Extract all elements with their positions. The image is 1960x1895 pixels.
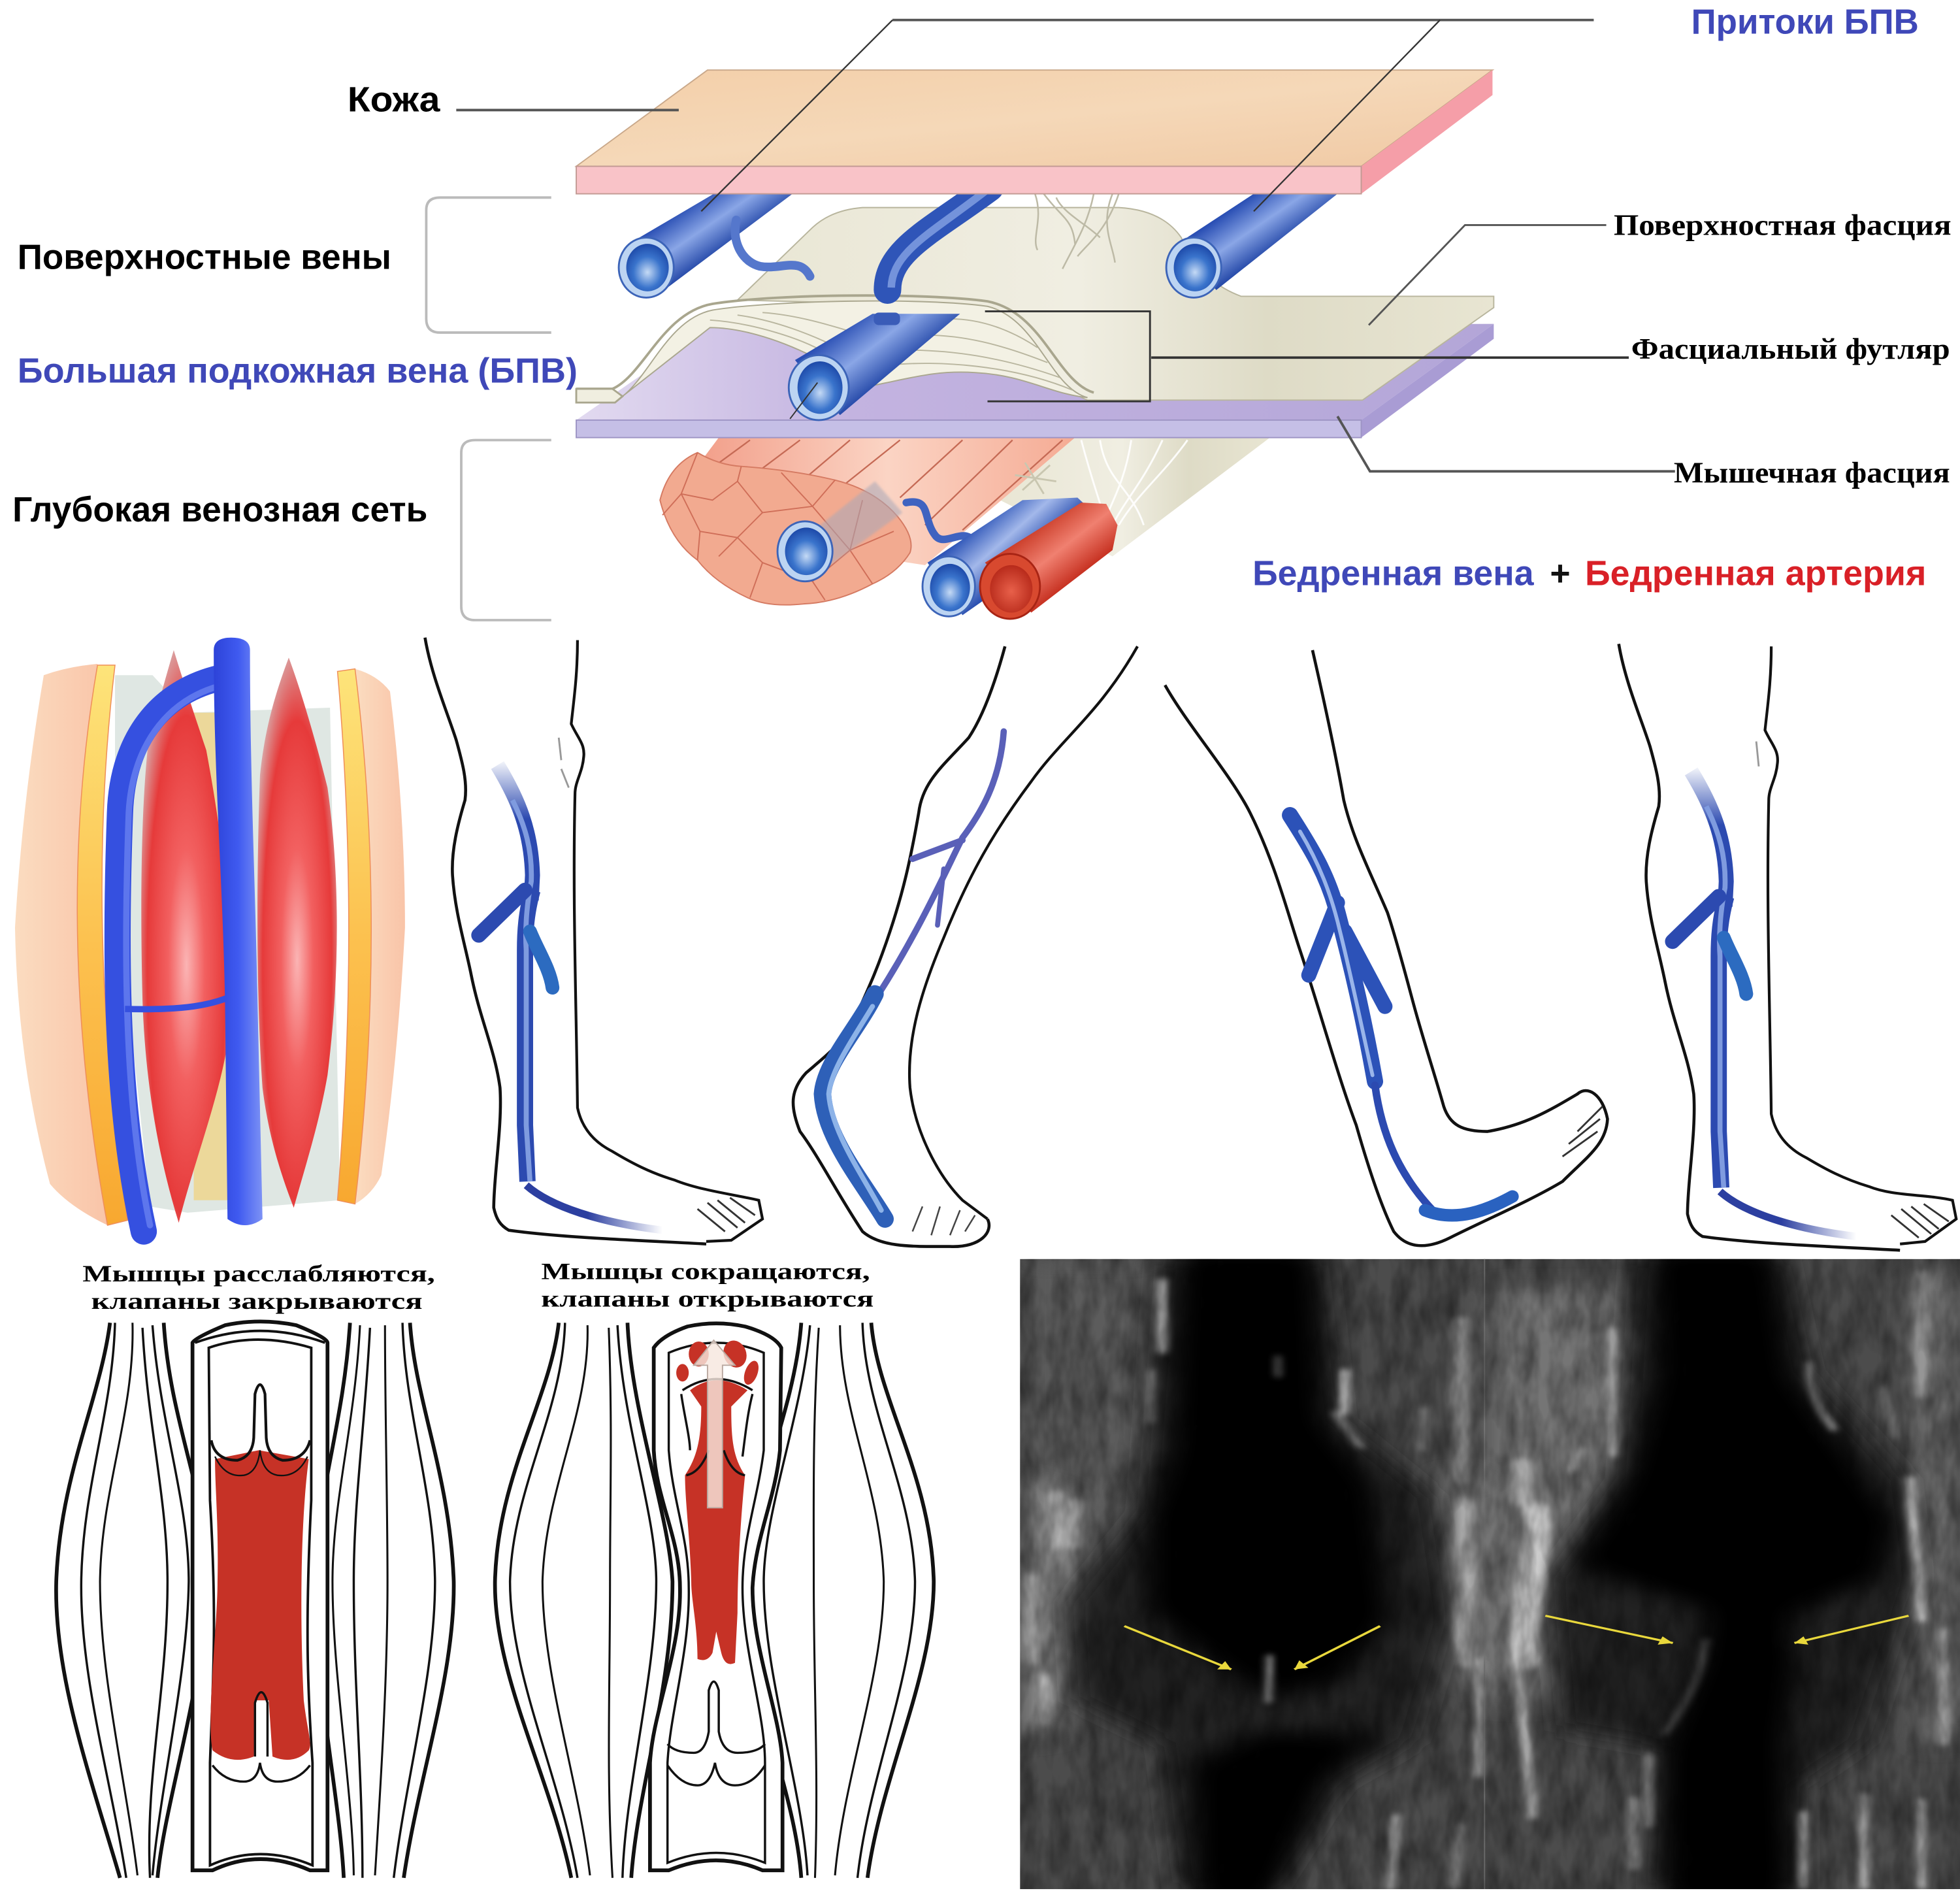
ultrasound speckle [1020, 1259, 1960, 1889]
deep vein shadow [813, 482, 902, 569]
left fat band [77, 665, 127, 1225]
ultrasound dark halos [1068, 1259, 1919, 1889]
closed lower valve [668, 1681, 765, 1785]
vein wall [193, 1321, 327, 1870]
left skin [15, 664, 108, 1225]
leader lines [456, 20, 1675, 471]
muscle fibres left [495, 1323, 672, 1878]
panel: contracted muscles and open valves [495, 1323, 934, 1878]
muscle body strip [700, 438, 1075, 565]
tributary squiggle [735, 220, 810, 276]
leg 4 outline and vein [1619, 644, 1956, 1250]
lower valve [212, 1692, 310, 1781]
superficial vein stub [874, 312, 900, 325]
caption: relaxed: клапаны закрываются [91, 1288, 423, 1314]
great saphenous vein leg 2 [823, 731, 1004, 1219]
caption: contracted: клапаны открываются [541, 1285, 874, 1311]
open upper valve leaflets [681, 1379, 753, 1475]
label: femoral vein + artery: Бедренная артерия [1585, 554, 1926, 593]
ultrasound black regions [1147, 1247, 1895, 1895]
superficial vein right tube [1166, 194, 1337, 297]
deep tributary squiggle [906, 502, 973, 540]
label: Мышечная фасция: Мышечная фасция [1674, 456, 1950, 489]
leg 2 outline and vein [793, 646, 1137, 1247]
leg 3 outline and vein [1165, 650, 1607, 1245]
caption: relaxed: Мышцы расслабляются, [82, 1261, 435, 1287]
blood column [210, 1450, 310, 1760]
fascial sheath left lip [576, 295, 1094, 393]
great saphenous vein leg 3 [1290, 815, 1512, 1215]
flow arrow [694, 1340, 735, 1508]
left muscle [141, 650, 231, 1223]
great saphenous vein tube [789, 314, 960, 420]
great saphenous vein leg 1 [479, 765, 662, 1230]
label: femoral vein + artery: Бедренная вена [1252, 554, 1535, 593]
fascia background [115, 675, 340, 1213]
label: Притоки БПВ: Притоки БПВ [1691, 3, 1919, 42]
muscle fibres left [56, 1323, 208, 1878]
panel: cross-section of muscle and veins [15, 638, 405, 1232]
label: Поверхностные вены: Поверхностные вены [18, 238, 391, 276]
caption: contracted [541, 1258, 874, 1311]
label: Кожа: Кожа [348, 80, 441, 119]
panel: relaxed muscles and closed valves [56, 1321, 454, 1878]
right muscle [257, 657, 337, 1208]
skin slab [576, 70, 1492, 194]
femoral vein [923, 498, 1100, 616]
caption: relaxed [82, 1261, 435, 1314]
label: femoral vein + artery [1252, 554, 1926, 593]
panel: ultrasound image [1020, 1247, 1960, 1895]
deep vein [214, 638, 263, 1225]
label: Фасциальный футляр: Фасциальный футляр [1631, 332, 1950, 365]
perforator vein [125, 988, 246, 1009]
panel: layered venous anatomy diagram [12, 3, 1952, 620]
blood spurts [676, 1337, 761, 1387]
ultrasound bright echoes [1032, 1277, 1943, 1887]
blood column [685, 1380, 747, 1664]
muscle cross-section [660, 453, 911, 605]
label: БПВ: Большая подкожная вена (БПВ) [18, 352, 578, 390]
label: Глубокая венозная сеть: Глубокая венозная сеть [12, 491, 427, 529]
muscle fibres right [315, 1323, 454, 1878]
muscle fibres right [745, 1323, 934, 1878]
superficial vein [118, 675, 235, 1232]
right fat band [338, 669, 371, 1204]
great saphenous vein leg 4 [1673, 772, 1856, 1236]
superficial vein left tube [619, 194, 792, 297]
connective fibers [1081, 440, 1188, 531]
caption: contracted: Мышцы сокращаются, [541, 1258, 870, 1284]
muscle fascia sheet [576, 324, 1494, 438]
fibers to skin [1035, 194, 1119, 269]
deep layer: muscle sheath [1000, 438, 1270, 556]
femoral artery [980, 503, 1117, 619]
upper valve [211, 1385, 310, 1460]
ultrasound divider [1484, 1259, 1485, 1889]
yellow arrows [1124, 1616, 1908, 1670]
deep vein opening [777, 521, 832, 582]
right skin [355, 669, 405, 1204]
superficial fascia sheet [738, 208, 1494, 400]
label: Поверхностная фасция: Поверхностная фасция [1614, 208, 1952, 242]
label: femoral vein + artery: + [1550, 554, 1571, 593]
fascial sheath interior [623, 301, 1088, 397]
curved middle tributary [887, 188, 990, 290]
leg 1 outline and vein [425, 638, 762, 1244]
ultrasound soft bright tissue [1020, 1260, 1960, 1743]
vein wall [650, 1323, 783, 1870]
brackets [426, 197, 551, 620]
